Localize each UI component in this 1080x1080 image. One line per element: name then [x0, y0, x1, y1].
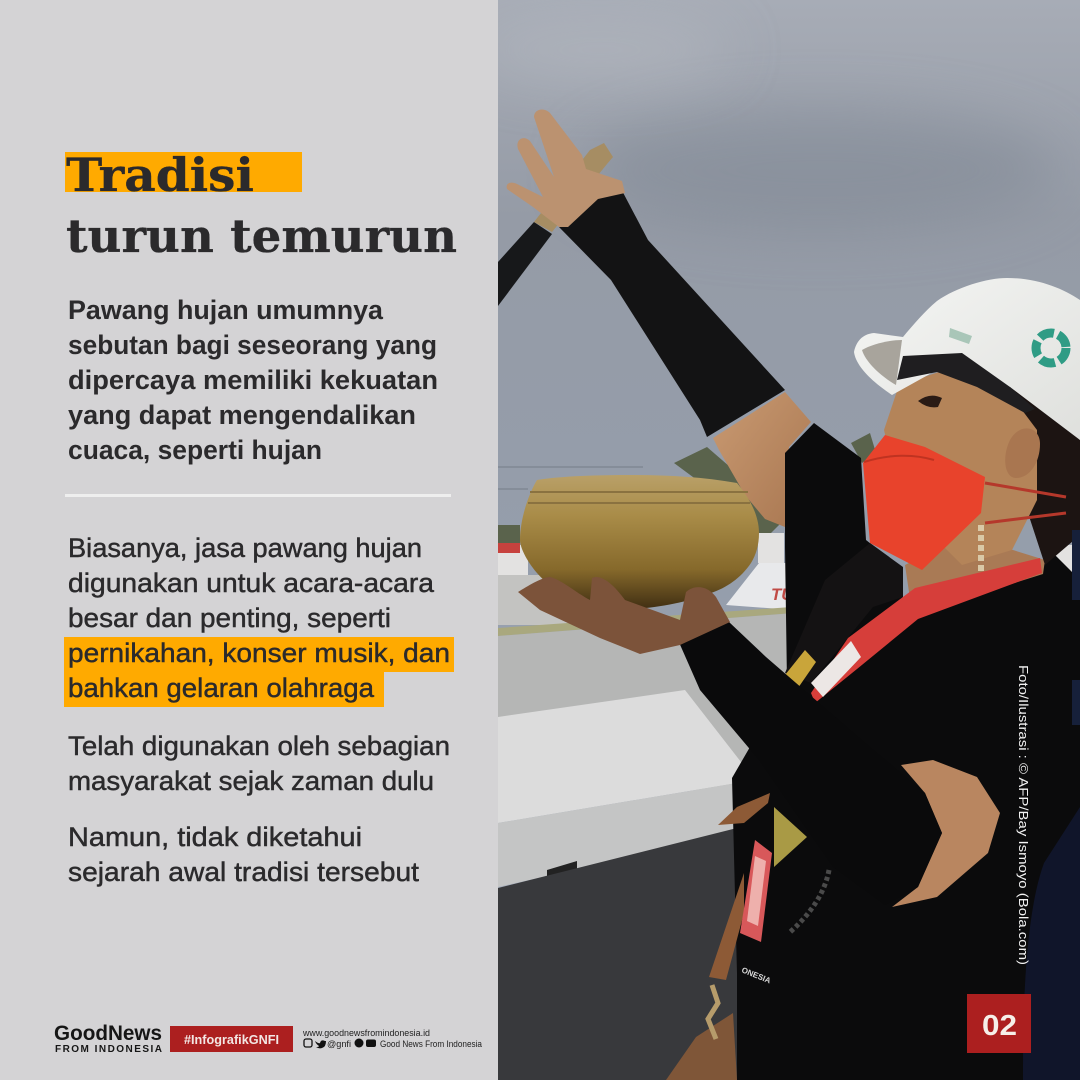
footer contact info: www.goodnewsfromindonesia.id [302, 1028, 430, 1038]
sign text: TURBO [771, 585, 831, 604]
raised arm sleeve [559, 183, 785, 437]
ear [1005, 428, 1040, 478]
lanyard [811, 558, 1042, 703]
hard hat [854, 278, 1080, 440]
bag [666, 1013, 737, 1080]
strap [709, 793, 770, 980]
shirt small text: ONESIA [740, 966, 772, 985]
text block: definition: sebutan bagi seseorang yang [68, 330, 437, 360]
navy shoulder sliver [1072, 530, 1080, 725]
text block: usage: besar dan penting, seperti [68, 603, 391, 633]
eye [918, 396, 942, 407]
title [66, 148, 457, 263]
recycle logo [1036, 333, 1066, 363]
icon: facebook [354, 1038, 364, 1048]
trees [498, 433, 876, 545]
drumstick [498, 222, 552, 306]
logo: GoodNews From Indonesia: FROM INDONESIA [55, 1044, 162, 1055]
lower arm sleeve [678, 622, 942, 905]
lower hand [518, 577, 730, 654]
shirt print [774, 807, 807, 867]
raised arm skin [713, 392, 811, 527]
text block: definition: Pawang hujan umumnya [68, 295, 384, 325]
navy figure [1023, 807, 1080, 1080]
face [884, 372, 1037, 565]
barrier front [498, 690, 755, 823]
text block: history: Telah digunakan oleh sebagian [68, 731, 450, 761]
footer contact info: Good News From Indonesia [380, 1039, 482, 1049]
page number badge [967, 994, 1031, 1053]
distant banners [498, 533, 1072, 575]
text block: definition: dipercaya memiliki kekuatan [68, 365, 438, 395]
red mask [863, 435, 985, 570]
road [498, 826, 745, 1080]
icon: youtube [366, 1040, 376, 1047]
text block: usage: pernikahan, konser musik, dan [68, 638, 450, 668]
hashtag badge [170, 1026, 293, 1052]
text block: definition [68, 295, 438, 465]
text block: unknown origin: Namun, tidak diketahui [68, 822, 362, 852]
earring [978, 525, 984, 573]
text block: usage: bahkan gelaran olahraga [68, 673, 375, 703]
distant fence [498, 466, 643, 490]
highlight: event examples [64, 637, 454, 707]
bag buckle [708, 985, 718, 1039]
title highlight [65, 152, 302, 192]
text block: history: masyarakat sejak zaman dulu [68, 766, 434, 796]
page number badge: 02 [982, 1010, 1017, 1042]
title: Tradisi [66, 148, 254, 202]
panel: text background [0, 0, 498, 1080]
photo: rain handler holding singing bowl [470, 0, 1080, 1080]
neck skin [905, 548, 1044, 592]
text block: unknown origin [68, 822, 420, 887]
text block: definition: cuaca, seperti hujan [68, 435, 322, 465]
text block: usage: digunakan untuk acara-acara [68, 568, 435, 598]
text block: usage: Biasanya, jasa pawang hujan [68, 533, 422, 563]
hair behind head [1010, 386, 1080, 565]
text block: history [68, 731, 450, 796]
photo credit: Foto/Ilustrasi : © AFP/Bay Ismoyo (Bola.com) [1016, 665, 1030, 965]
dark hair behind neck [785, 543, 903, 683]
singing bowl [520, 475, 759, 610]
hashtag badge: #InfografikGNFI [184, 1032, 279, 1047]
icon: twitter [315, 1040, 326, 1048]
logo: GoodNews From Indonesia: GoodNews [54, 1022, 162, 1045]
shirt sleeve and body [732, 423, 1080, 1080]
footer contact info [302, 1028, 482, 1049]
inner arm skin [892, 760, 1000, 907]
shirt yellow detail [785, 650, 816, 688]
logo: GoodNews From Indonesia [54, 1022, 162, 1055]
footer contact info: @gnfi [327, 1039, 351, 1049]
raised hand [507, 110, 625, 227]
title: turun temurun [66, 209, 457, 263]
text block: usage [68, 533, 450, 703]
barrier far [498, 575, 568, 625]
text block: unknown origin: sejarah awal tradisi tersebut [68, 857, 420, 887]
icon: instagram [304, 1039, 312, 1047]
text block: definition: yang dapat mengendalikan [68, 400, 416, 430]
ID card [740, 840, 772, 942]
